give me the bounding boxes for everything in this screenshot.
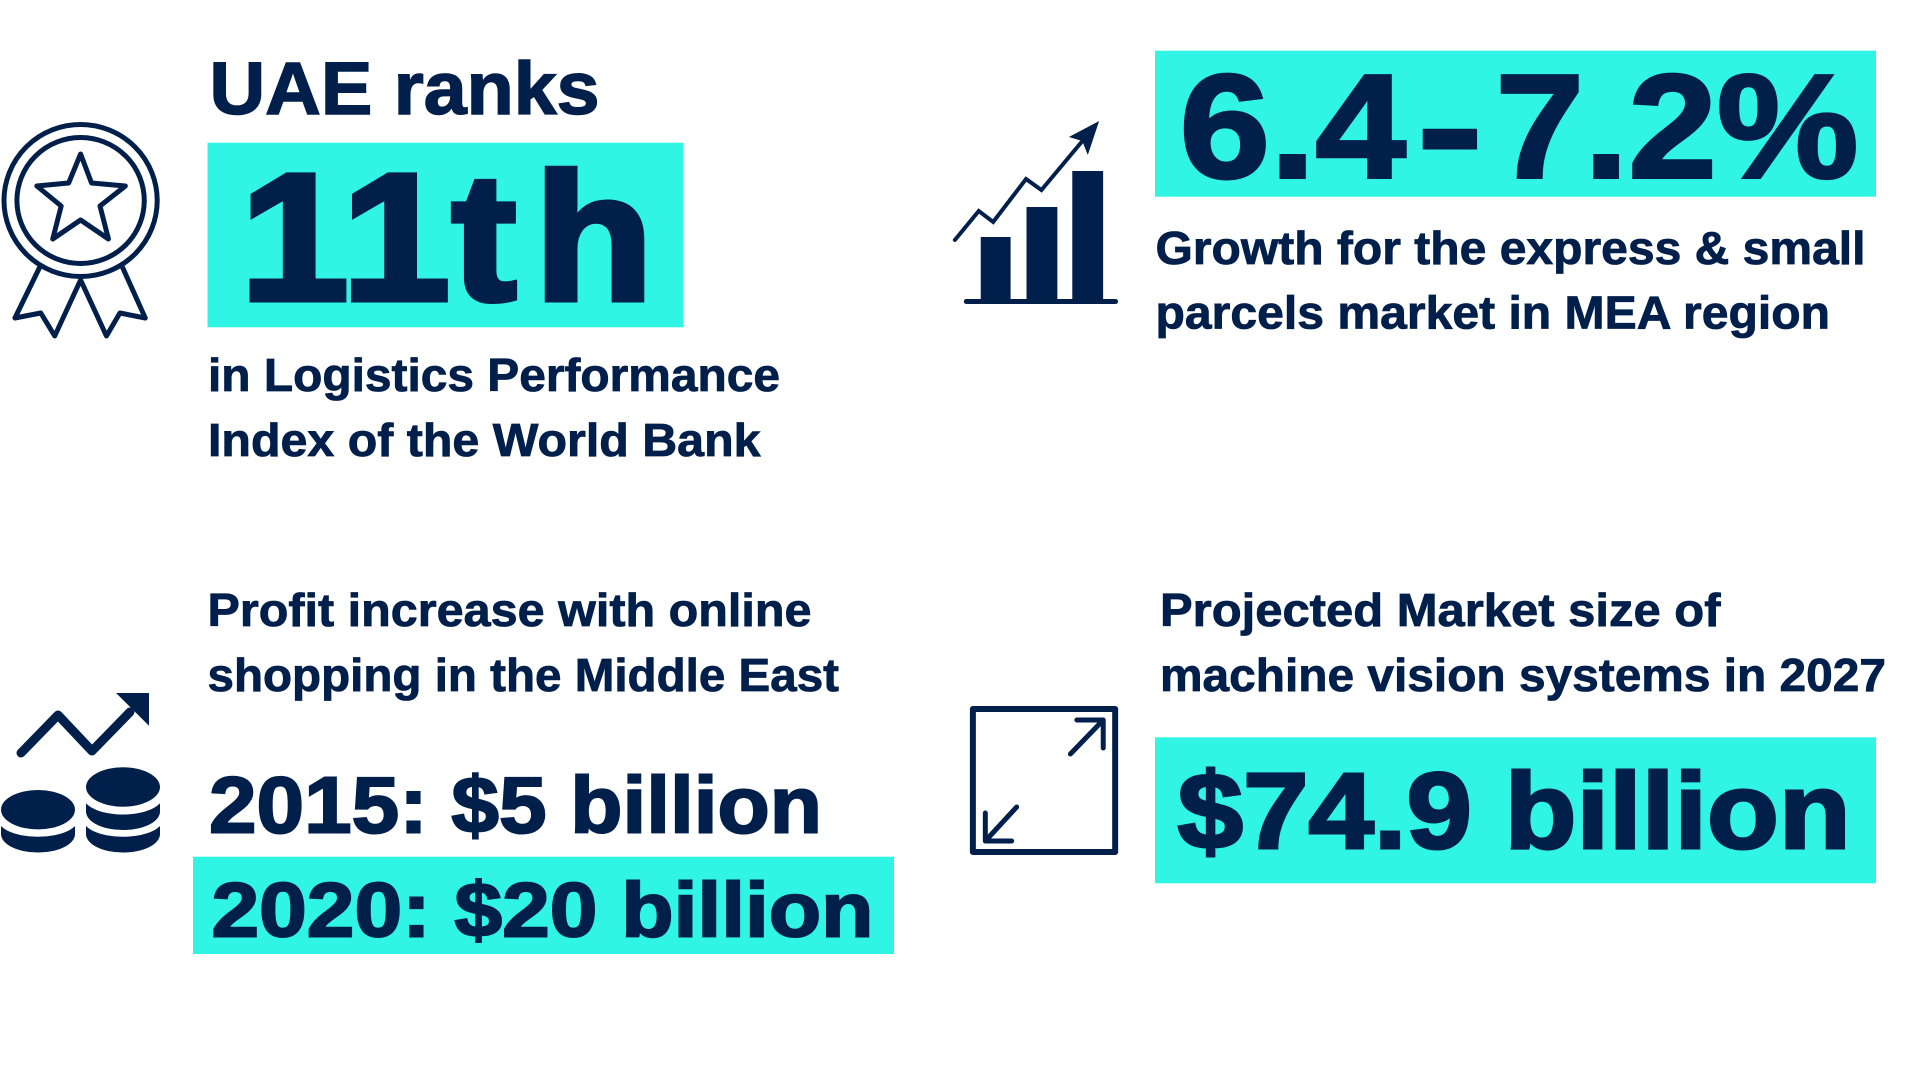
highlight box: 2020 profit: 2020: $20 billion xyxy=(212,868,874,954)
highlight box: 11th: 11th xyxy=(240,135,653,338)
text: profit description xyxy=(208,584,839,701)
icon: coins with trend arrow xyxy=(1,693,160,852)
highlight box: market size: $74.9 billion xyxy=(1178,750,1851,871)
highlight box: growth percentage: 6.4 xyxy=(1180,44,1406,210)
panel: parcels growth xyxy=(955,44,1876,338)
highlight box: growth percentage xyxy=(1155,44,1876,210)
text: logistics index description: Index of the World Bank xyxy=(208,414,761,466)
icon: award medal xyxy=(4,124,157,336)
panel: UAE ranking xyxy=(4,47,780,466)
text: market description xyxy=(1160,584,1886,701)
text: growth description: Growth for the express & small xyxy=(1156,222,1866,274)
text: market description: Projected Market size of xyxy=(1160,584,1721,636)
icon: expand square xyxy=(973,709,1115,852)
panel: online shopping profit xyxy=(1,584,894,954)
text: growth description: parcels market in MEA region xyxy=(1156,286,1830,338)
heading: UAE ranks: UAE ranks xyxy=(210,47,600,130)
text: growth description xyxy=(1156,222,1866,338)
highlight box: growth percentage: 7.2% xyxy=(1496,44,1858,210)
stat: 2015 profit: 2015: $5 billion xyxy=(209,760,822,850)
text: logistics index description: in Logistics Performance xyxy=(208,349,780,401)
panel: machine vision market xyxy=(973,584,1886,883)
icon: rising bar chart xyxy=(955,121,1118,304)
text: logistics index description xyxy=(208,349,780,466)
text: profit description: Profit increase with online xyxy=(208,584,812,636)
text: market description: machine vision systems in 2027 xyxy=(1160,649,1886,701)
highlight box: growth percentage: - xyxy=(1417,44,1483,210)
text: profit description: shopping in the Middle East xyxy=(208,649,839,701)
